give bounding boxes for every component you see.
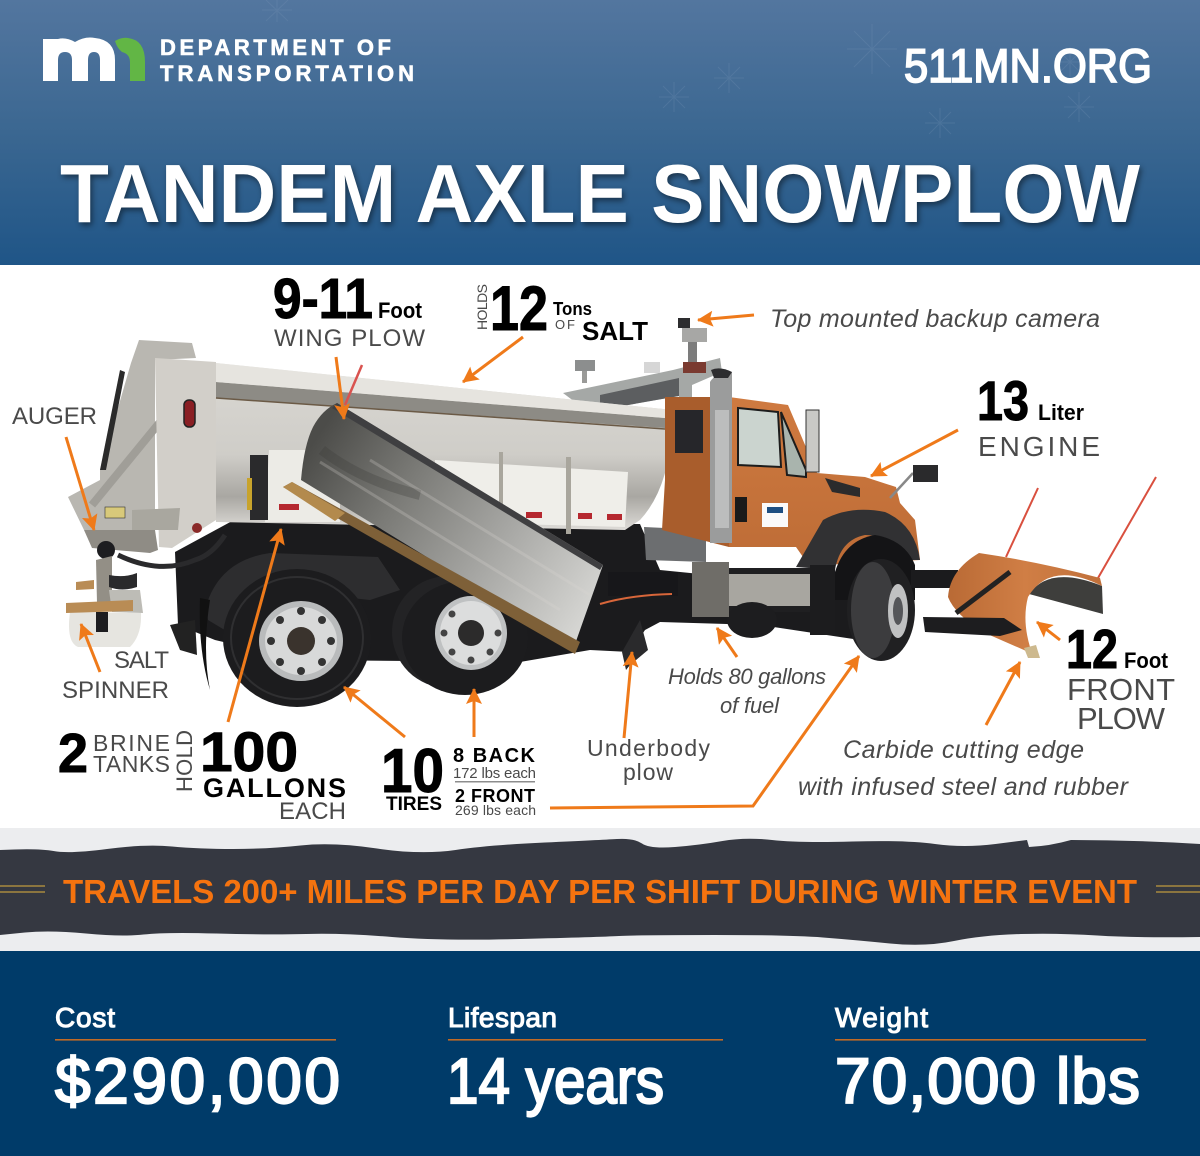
callout: tires <box>381 737 536 818</box>
arrow: engine <box>871 430 958 476</box>
arrow: camera <box>698 315 754 320</box>
arrow: fuel <box>717 628 737 657</box>
arrow: front plow <box>1037 622 1060 640</box>
callout: auger: AUGER <box>12 403 97 430</box>
callout: salt capacity: SALT <box>582 316 648 346</box>
panel: mileage banner <box>0 828 1200 951</box>
stat: lifespan <box>447 1002 723 1117</box>
callout: salt spinner: SALT <box>114 647 169 674</box>
arrow: cutting edge <box>986 662 1020 725</box>
callout: wing plow: WING PLOW <box>274 325 425 352</box>
callout: brine tanks: GALLONS <box>203 773 346 803</box>
callout: salt capacity: Tons <box>553 299 592 319</box>
callout: engine: Liter <box>1038 400 1084 425</box>
panel: statistics <box>0 951 1200 1156</box>
callout: brine tanks <box>58 720 346 825</box>
stat: weight: 70,000 lbs <box>835 1045 1140 1117</box>
callout: salt capacity: HOLDS <box>474 284 490 330</box>
stat: lifespan: Lifespan <box>448 1002 557 1033</box>
callout: fuel <box>668 664 826 718</box>
stat: lifespan: 14 years <box>447 1045 664 1117</box>
gold rules <box>0 886 1200 892</box>
arrow: underbody <box>624 652 632 738</box>
arrow: back tires <box>472 689 476 737</box>
callout: salt capacity <box>474 274 648 346</box>
stat: cost: Cost <box>55 1002 115 1033</box>
callout: tires: 10 <box>381 737 444 806</box>
panel: header <box>0 0 1200 265</box>
callout: engine: ENGINE <box>978 431 1100 462</box>
callout: salt spinner: SPINNER <box>62 677 169 704</box>
truck: rear wheels <box>223 569 528 707</box>
callout: underbody plow: plow <box>623 759 673 785</box>
stat: weight: Weight <box>835 1002 928 1033</box>
callout: wing plow: Foot <box>378 298 423 323</box>
callout: tires: 2 FRONT <box>455 786 535 806</box>
arrow: front tire <box>550 656 859 808</box>
callout: salt spinner <box>62 647 169 704</box>
callout: front plow: 12 <box>1066 618 1118 680</box>
truck: cab <box>662 397 938 635</box>
torn dark strip <box>0 839 1200 945</box>
callout: front plow: Foot <box>1124 648 1169 673</box>
callout: backup camera: Top mounted backup camera <box>770 305 1100 333</box>
callout: tires: 8 BACK <box>453 745 536 767</box>
stat: cost <box>55 1002 340 1117</box>
stat: weight <box>835 1002 1146 1117</box>
panel: truck illustration <box>66 318 1156 707</box>
callout: front plow: PLOW <box>1077 701 1166 736</box>
callout: brine tanks: 100 <box>200 720 298 783</box>
truck: exhaust stack <box>710 368 732 543</box>
callout: underbody plow: Underbody <box>587 735 710 761</box>
truck: rear gate and auger <box>68 340 216 553</box>
department name <box>160 35 414 86</box>
callout: engine <box>977 369 1100 462</box>
callout: front plow: FRONT <box>1067 672 1175 707</box>
truck: spinner <box>66 541 143 647</box>
truck: mid frame and tank <box>600 527 811 638</box>
callout: tires: TIRES <box>386 794 442 815</box>
callout: salt capacity: 12 <box>490 274 548 344</box>
callout: cutting edge <box>798 736 1130 801</box>
banner text: TRAVELS 200+ MILES PER DAY PER SHIFT DURING WINTER EVENT <box>63 873 1137 910</box>
callout: brine tanks: EACH <box>279 798 346 825</box>
truck: front wheel <box>847 559 915 661</box>
callout: brine tanks: 2 <box>58 722 88 784</box>
truck: front plow <box>911 477 1156 658</box>
panel: callouts <box>12 267 1175 825</box>
callout: brine tanks: TANKS <box>93 751 170 777</box>
callout: cutting edge: with infused steel and rubber <box>798 773 1130 801</box>
callout: fuel: of fuel <box>720 693 780 718</box>
snow sparkles <box>262 0 1094 138</box>
arrow: spinner <box>81 624 100 672</box>
truck: brine tanks <box>247 450 628 534</box>
arrow: brine <box>228 529 281 722</box>
truck: chassis <box>118 520 860 690</box>
callout: fuel: Holds 80 gallons <box>668 664 826 689</box>
truck: wing plow <box>283 365 603 654</box>
callout: front plow <box>1066 618 1175 736</box>
callout: wing plow: 9-11 <box>273 267 373 331</box>
callout: brine tanks: HOLD <box>172 730 197 792</box>
truck: hopper <box>216 363 673 530</box>
callout: engine: 13 <box>977 369 1029 432</box>
arrow: rear tire <box>344 687 405 737</box>
callout: underbody plow <box>587 735 710 785</box>
arrow: salt <box>463 337 523 382</box>
title: TANDEM AXLE SNOWPLOW <box>60 147 1141 240</box>
callout: tires: 269 lbs each <box>455 802 536 818</box>
department name: DEPARTMENT OF <box>160 35 391 60</box>
truck: rack and beacons <box>563 318 722 430</box>
callout: salt capacity: OF <box>555 317 575 332</box>
arrow: auger <box>66 437 94 530</box>
logo mark <box>43 38 145 81</box>
callout: brine tanks: BRINE <box>93 730 170 756</box>
stat: cost: $290,000 <box>55 1045 340 1117</box>
arrow: wing plow <box>336 357 344 419</box>
callout: wing plow <box>273 267 425 352</box>
callout: tires: 172 lbs each <box>453 765 536 782</box>
department name: TRANSPORTATION <box>160 61 414 86</box>
callout: cutting edge: Carbide cutting edge <box>843 736 1084 764</box>
website: 511MN.ORG <box>904 39 1152 92</box>
